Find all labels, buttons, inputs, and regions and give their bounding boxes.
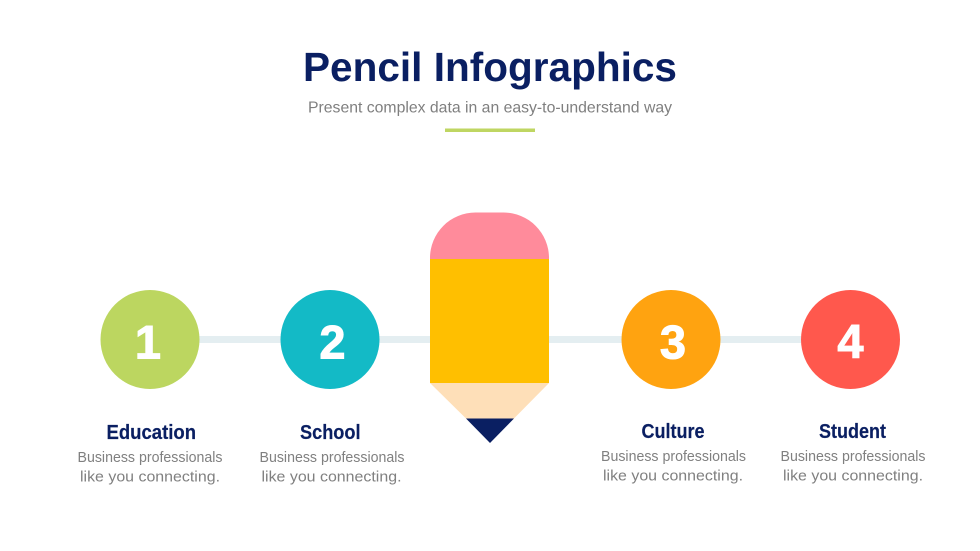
- description: education: Business professionals: [78, 449, 222, 466]
- description: school: Business professionals: [260, 449, 404, 466]
- circle badge 4: [801, 290, 900, 389]
- heading: culture: Culture: [642, 421, 704, 443]
- number 2: 2: [319, 316, 346, 368]
- step 2: school: [260, 290, 404, 486]
- description: culture: [601, 448, 746, 484]
- number 4: 4: [837, 314, 864, 368]
- description: education: like you connecting.: [80, 468, 220, 486]
- pencil body: [430, 259, 549, 383]
- circle badge 3: [622, 290, 720, 389]
- subtitle: Present complex data in an easy-to-understand way: [308, 100, 672, 116]
- title underline: [445, 128, 535, 132]
- pencil lead tip: [466, 418, 514, 443]
- circle badge 2: [280, 290, 380, 389]
- circle badge 1: [100, 290, 200, 389]
- pencil wood cone: [430, 383, 549, 418]
- connector line: [150, 336, 850, 343]
- heading: school: School: [300, 422, 360, 444]
- description: student: [780, 448, 926, 484]
- description: education: [78, 449, 222, 486]
- description: school: [260, 449, 404, 486]
- description: student: like you connecting.: [783, 468, 923, 484]
- heading: student: Student: [819, 421, 886, 443]
- description: student: Business professionals: [780, 448, 926, 465]
- step 3: culture: [601, 290, 746, 484]
- step 1: education: [78, 290, 222, 486]
- step 4: student: [780, 290, 926, 484]
- pencil eraser: [430, 212, 549, 259]
- heading: education: Education: [106, 422, 196, 444]
- description: culture: Business professionals: [601, 448, 746, 465]
- description: school: like you connecting.: [262, 468, 402, 486]
- title: Pencil Infographics: [303, 44, 677, 90]
- description: culture: like you connecting.: [603, 468, 743, 484]
- number 3: 3: [660, 316, 686, 368]
- pencil illustration: [430, 212, 549, 443]
- number 1: 1: [135, 316, 161, 368]
